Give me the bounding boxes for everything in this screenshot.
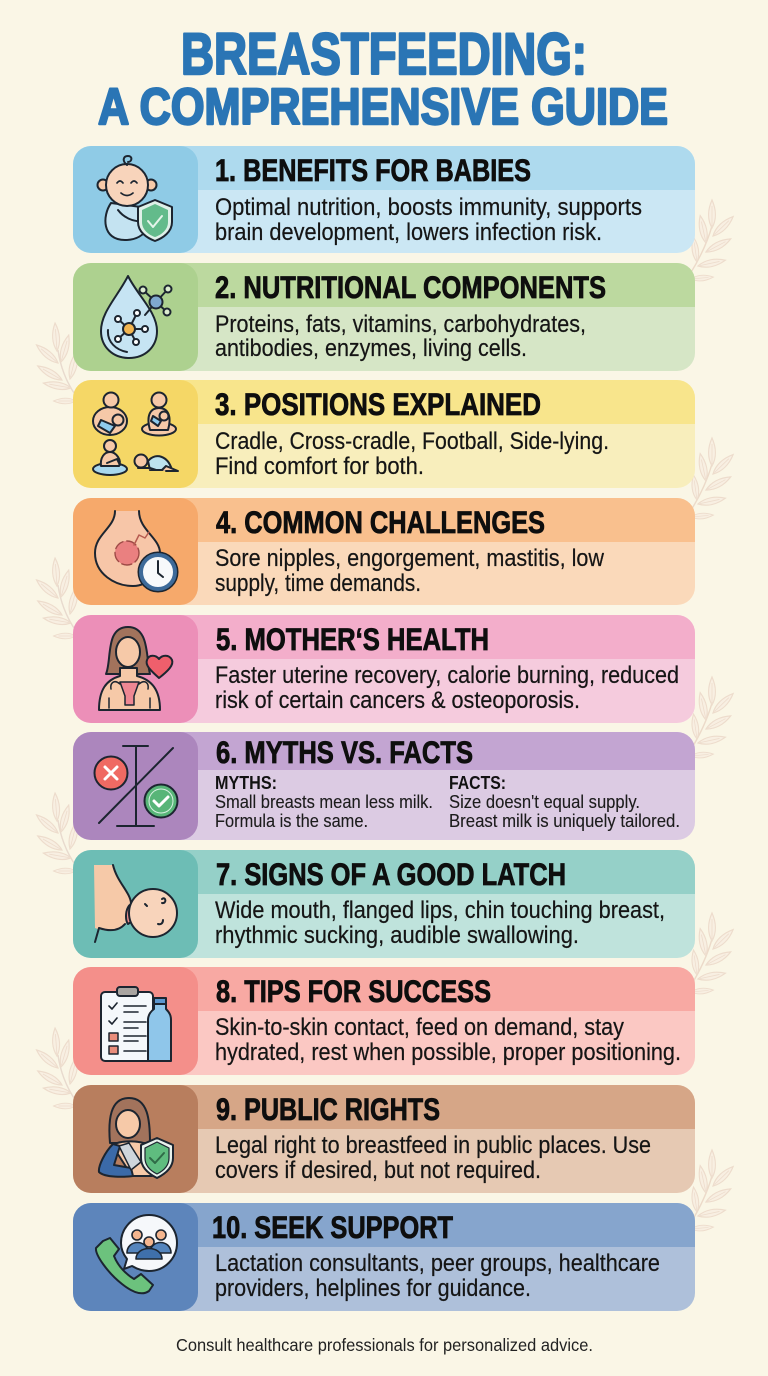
column: myths: Formula is the same. — [215, 811, 368, 831]
body text: Lactation consultants, peer groups, healthcare — [215, 1250, 660, 1277]
heading: 9. PUBLIC RIGHTS — [216, 1091, 440, 1127]
panel: benefits for babies — [73, 146, 695, 253]
footer note: Consult healthcare professionals for personalized advice. — [176, 1335, 593, 1355]
body text: Wide mouth, flanged lips, chin touching breast, — [215, 897, 665, 924]
icon: myth and fact symbols — [94, 746, 178, 826]
body text: rhythmic sucking, audible swallowing. — [215, 922, 579, 949]
body text: supply, time demands. — [215, 570, 421, 597]
heading: 5. MOTHER‘S HEALTH — [216, 621, 489, 657]
body text: covers if desired, but not required. — [215, 1157, 541, 1184]
icon: checklist and water bottle — [101, 987, 171, 1061]
panel: common challenges — [73, 498, 695, 605]
body text: Skin-to-skin contact, feed on demand, stay — [215, 1014, 624, 1041]
body text — [215, 194, 642, 246]
heading: 7. SIGNS OF A GOOD LATCH — [216, 856, 566, 892]
icon: four feeding positions — [93, 392, 178, 475]
body text: brain development, lowers infection risk. — [215, 219, 602, 246]
icon: baby with shield — [98, 156, 172, 241]
heading: 6. MYTHS VS. FACTS — [216, 734, 473, 770]
column: myths: Small breasts mean less milk. — [215, 792, 433, 812]
body text: Optimal nutrition, boosts immunity, supports — [215, 194, 642, 221]
title: BREASTFEEDING: — [181, 22, 587, 87]
body text — [215, 1014, 681, 1066]
panel: positions explained — [73, 380, 695, 488]
panel: mother's health — [73, 615, 695, 723]
body text — [215, 1132, 651, 1184]
decorative leaf sprigs — [34, 200, 735, 1232]
body text: Faster uterine recovery, calorie burning, reduced — [215, 662, 679, 689]
body text: risk of certain cancers & osteoporosis. — [215, 687, 580, 714]
panel: seek support — [73, 1203, 695, 1311]
body text: Find comfort for both. — [215, 453, 424, 480]
heading: 1. BENEFITS FOR BABIES — [215, 152, 531, 188]
icon: milk drop with molecules — [101, 276, 172, 358]
body text — [215, 545, 605, 597]
column: myths — [215, 773, 433, 831]
body text: Cradle, Cross-cradle, Football, Side-lying. — [215, 428, 609, 455]
body text: Legal right to breastfeed in public places. Use — [215, 1132, 651, 1159]
body text: providers, helplines for guidance. — [215, 1275, 531, 1302]
heading: 10. SEEK SUPPORT — [212, 1209, 453, 1245]
body text — [215, 662, 679, 714]
column: facts: Size doesn't equal supply. — [449, 792, 640, 812]
body text: Proteins, fats, vitamins, carbohydrates, — [215, 311, 586, 338]
panel: signs of a good latch — [73, 850, 695, 958]
column: facts: Breast milk is uniquely tailored. — [449, 811, 680, 831]
icon: baby latching — [94, 865, 177, 942]
column: facts: FACTS: — [449, 773, 506, 793]
panel: myths vs facts — [73, 732, 695, 840]
panel: nutritional components — [73, 263, 695, 371]
title: A COMPREHENSIVE GUIDE — [98, 78, 668, 135]
icon: mother with shield — [99, 1098, 173, 1178]
heading: 4. COMMON CHALLENGES — [216, 504, 545, 540]
heading: 8. TIPS FOR SUCCESS — [216, 973, 491, 1009]
body text — [215, 311, 586, 362]
heading: 2. NUTRITIONAL COMPONENTS — [215, 269, 606, 305]
body text: antibodies, enzymes, living cells. — [215, 335, 527, 362]
column: facts — [449, 773, 680, 831]
icon: phone and support group — [96, 1215, 177, 1293]
panel: public rights — [73, 1085, 695, 1193]
icon: mother with heart — [99, 627, 172, 710]
body text: Sore nipples, engorgement, mastitis, low — [215, 545, 605, 572]
panel: tips for success — [73, 967, 695, 1075]
body text — [215, 1250, 660, 1302]
title — [98, 22, 668, 135]
heading: 3. POSITIONS EXPLAINED — [215, 386, 541, 422]
body text — [215, 428, 609, 480]
body text: hydrated, rest when possible, proper positioning. — [215, 1039, 681, 1066]
icon: sore breast and clock — [95, 511, 178, 592]
body text — [215, 897, 665, 949]
column: myths: MYTHS: — [215, 773, 277, 793]
